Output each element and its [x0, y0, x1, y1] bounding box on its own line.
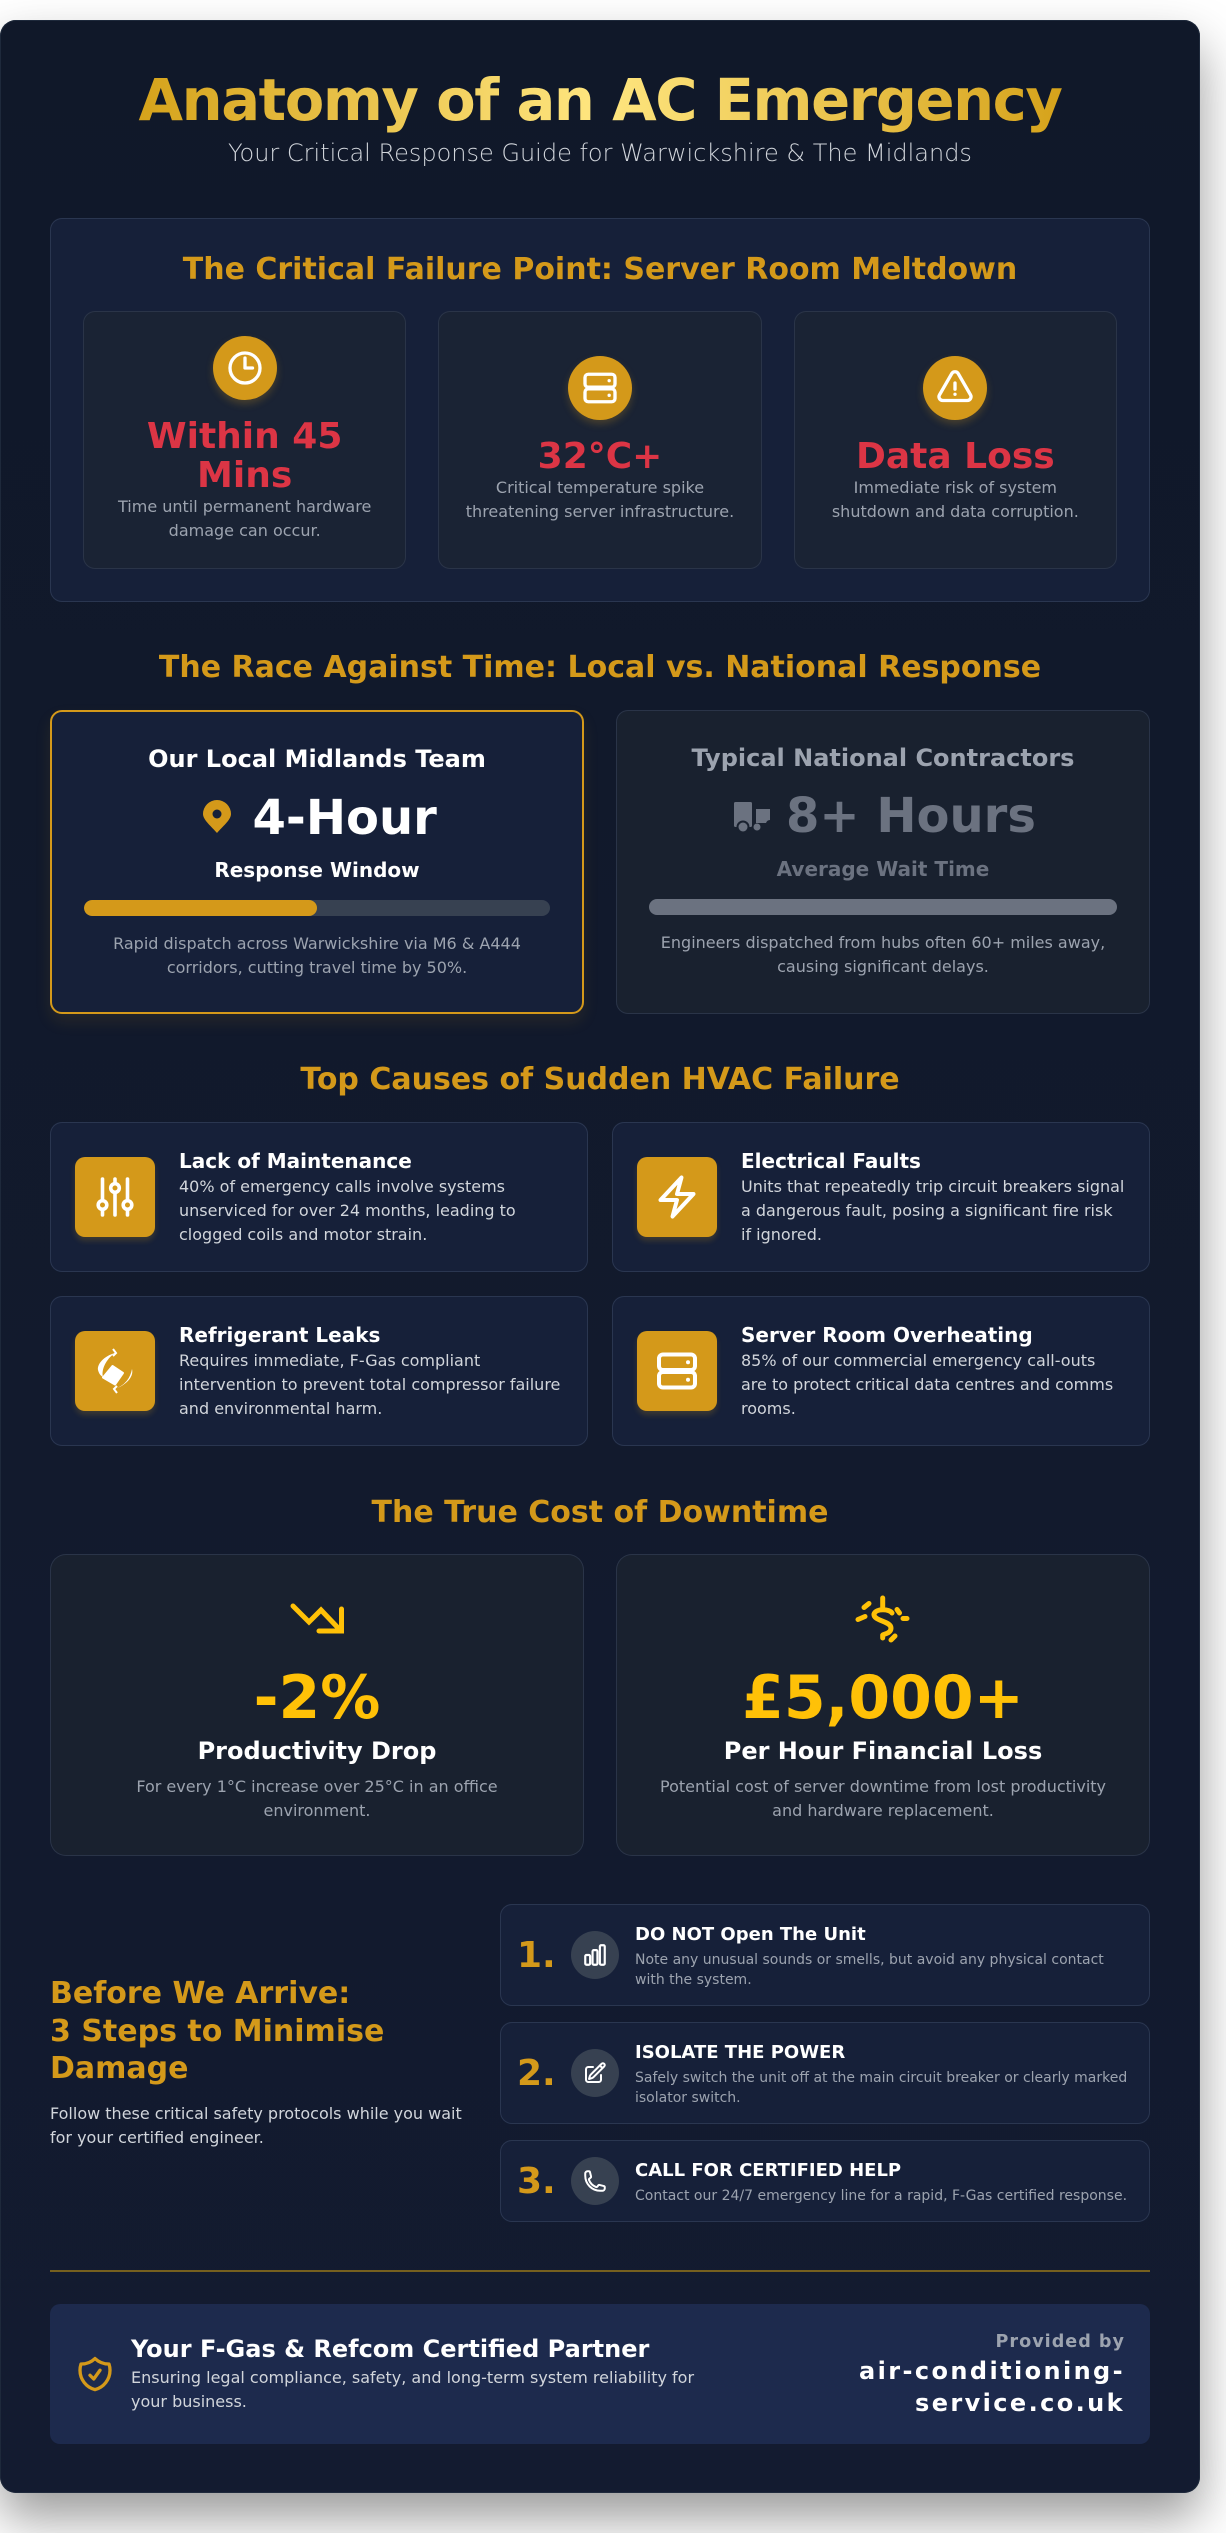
footer text: Ensuring legal compliance, safety, and long-term system reliability for [131, 2368, 694, 2387]
card: productivity drop [50, 1554, 584, 1856]
heading: before we arrive: Before We Arrive: [50, 1976, 350, 2011]
number: 2. [517, 2053, 556, 2094]
description [466, 478, 734, 521]
description: For every 1°C increase over 25°C in an office [136, 1777, 498, 1796]
step text: with the system. [635, 1972, 752, 1988]
description [118, 497, 371, 540]
icon: truck [734, 802, 770, 832]
description [113, 934, 521, 977]
step text [635, 2070, 1127, 2106]
card: local team [50, 710, 584, 1014]
footer text: your business. [131, 2392, 247, 2411]
card text [741, 1351, 1113, 1418]
description: causing significant delays. [777, 957, 989, 976]
provided by: Provided by [996, 2332, 1125, 2352]
heading: true cost: The True Cost of Downtime [372, 1494, 828, 1530]
description: corridors, cutting travel time by 50%. [167, 958, 467, 977]
card: 32C [438, 310, 762, 568]
footer text [131, 2368, 694, 2411]
card text: Units that repeatedly trip circuit breakers signal [741, 1177, 1124, 1196]
icon: bars [571, 1931, 619, 1979]
step title: ISOLATE THE POWER [635, 2042, 845, 2063]
text: safety protocols [50, 2104, 462, 2147]
card title: Refrigerant Leaks [179, 1323, 380, 1347]
card text: a dangerous fault, posing a significant fire risk [741, 1201, 1113, 1220]
number: 1. [517, 1935, 556, 1976]
card text: 40% of emergency calls involve systems [179, 1177, 505, 1196]
card title: Typical National Contractors [692, 744, 1074, 772]
description [661, 932, 1105, 976]
card title: Electrical Faults [741, 1149, 921, 1173]
step 3 [500, 2140, 1150, 2222]
heading: before we arrive: 3 Steps to Minimise [50, 2014, 384, 2048]
card: server room overheating [612, 1296, 1150, 1446]
card title: Server Room Overheating [741, 1323, 1033, 1347]
description: environment. [264, 1801, 370, 1820]
card: national contractors [616, 710, 1150, 1014]
stat: -2%: -2% [254, 1662, 380, 1732]
icon: map pin [203, 800, 231, 833]
description [832, 478, 1079, 521]
description [660, 1777, 1106, 1820]
description: Immediate risk of system [854, 478, 1057, 497]
text: safety protocols: for your certified engineer. [50, 2128, 264, 2147]
stat: 8+ hours: 8+ Hours [786, 788, 1036, 844]
label: Per Hour Financial Loss [724, 1737, 1042, 1765]
description: Critical temperature spike [496, 478, 704, 497]
card text: intervention to prevent total compressor failure [179, 1375, 560, 1394]
icon: refrigerant [75, 1331, 155, 1411]
heading: race against time: The Race Against Time: Local vs. National Response [159, 650, 1041, 685]
title [0, 61, 1200, 141]
description: Engineers dispatched from hubs often 60+ miles away, [661, 932, 1105, 952]
website [859, 2357, 1125, 2416]
icon: clock [213, 336, 277, 400]
description [136, 1777, 498, 1820]
label: Response Window [214, 858, 420, 882]
description: Time until permanent hardware [118, 497, 371, 516]
description: Rapid dispatch across Warwickshire via M6 & A444 [113, 934, 521, 952]
card text: if ignored. [741, 1225, 822, 1244]
progress bar [649, 899, 1117, 915]
icon: sliders [75, 1157, 155, 1237]
card: lack of maintenance [50, 1122, 588, 1272]
number: 3. [517, 2161, 556, 2202]
panel: critical failure point [50, 218, 1150, 602]
card text: are to protect critical data centres and comms [741, 1375, 1113, 1394]
stat: within 45 mins: Mins [197, 455, 292, 496]
icon: server [568, 356, 632, 420]
card: financial loss [616, 1554, 1150, 1856]
card text: unserviced for over 24 months, leading to [179, 1201, 516, 1220]
card text [741, 1177, 1124, 1244]
step text [635, 1952, 1104, 1988]
card text: Requires immediate, F-Gas compliant [179, 1351, 480, 1370]
description: and hardware replacement. [772, 1801, 994, 1820]
icon: dollar with fragments [856, 1596, 910, 1642]
heading: top causes: Top Causes of Sudden HVAC Failure [300, 1062, 900, 1097]
card title: Our Local Midlands Team [148, 745, 486, 773]
stat: 4-hour: 4-Hour [252, 790, 437, 846]
card: electrical faults [612, 1122, 1150, 1272]
icon: pen [571, 2049, 619, 2097]
icon: server [637, 1331, 717, 1411]
card: data loss [794, 310, 1117, 568]
icon: trending down [290, 1604, 344, 1634]
description: damage can occur. [169, 521, 321, 540]
card text [179, 1177, 516, 1244]
card text [179, 1351, 560, 1418]
label: Productivity Drop [198, 1737, 436, 1765]
icon: phone [571, 2157, 619, 2205]
card text: rooms. [741, 1399, 796, 1418]
step text: Safely switch the unit off at the main circuit breaker or clearly marked [635, 2070, 1127, 2086]
stat: within 45 mins [147, 416, 342, 496]
description: threatening server infrastructure. [466, 502, 734, 521]
card text: and environmental harm. [179, 1399, 382, 1418]
card: refrigerant leaks [50, 1296, 588, 1446]
label: Average Wait Time [777, 857, 989, 881]
footer title: Your F-Gas & Refcom Certified Partner [131, 2335, 649, 2363]
card title: Lack of Maintenance [179, 1149, 412, 1173]
card: within 45 mins [83, 310, 406, 568]
description: shutdown and data corruption. [832, 502, 1079, 521]
icon: lightning bolt [637, 1157, 717, 1237]
website: service.co.uk [915, 2388, 1125, 2416]
step 1 [500, 1904, 1150, 2006]
heading: before we arrive: Damage [50, 2051, 188, 2086]
stat: data loss: Data Loss [856, 436, 1055, 476]
card text: 85% of our commercial emergency call-outs [741, 1351, 1095, 1370]
subtitle: Your Critical Response Guide for Warwickshire & The Midlands [228, 139, 972, 167]
icon: shield check [78, 2356, 112, 2392]
stat: 32C: 32°C+ [538, 436, 662, 476]
card text: clogged coils and motor strain. [179, 1225, 427, 1244]
step text: Note any unusual sounds or smells, but avoid any physical contact [635, 1952, 1104, 1968]
step text: Contact our 24/7 emergency line for a rapid, F-Gas certified response. [635, 2188, 1127, 2204]
stat: 5000+: £5,000+ [742, 1662, 1024, 1732]
step title: CALL FOR CERTIFIED HELP [635, 2160, 901, 2181]
footer panel [50, 2304, 1150, 2444]
heading: critical failure point: The Critical Failure Point: Server Room Meltdown [183, 252, 1017, 287]
progress bar [84, 900, 550, 916]
website: air-conditioning- [859, 2357, 1125, 2385]
description: Potential cost of server downtime from lost productivity [660, 1777, 1106, 1796]
step title: DO NOT Open The Unit [635, 1924, 866, 1945]
step text: isolator switch. [635, 2090, 741, 2106]
icon: warning triangle [923, 356, 987, 420]
stat: within 45 mins: Within 45 [147, 416, 342, 456]
text: safety protocols: Follow these critical safety protocols while you wait [50, 2104, 462, 2123]
title: Anatomy of an AC Emergency [138, 67, 1061, 134]
step 2 [500, 2022, 1150, 2124]
heading: before we arrive [50, 1976, 384, 2086]
